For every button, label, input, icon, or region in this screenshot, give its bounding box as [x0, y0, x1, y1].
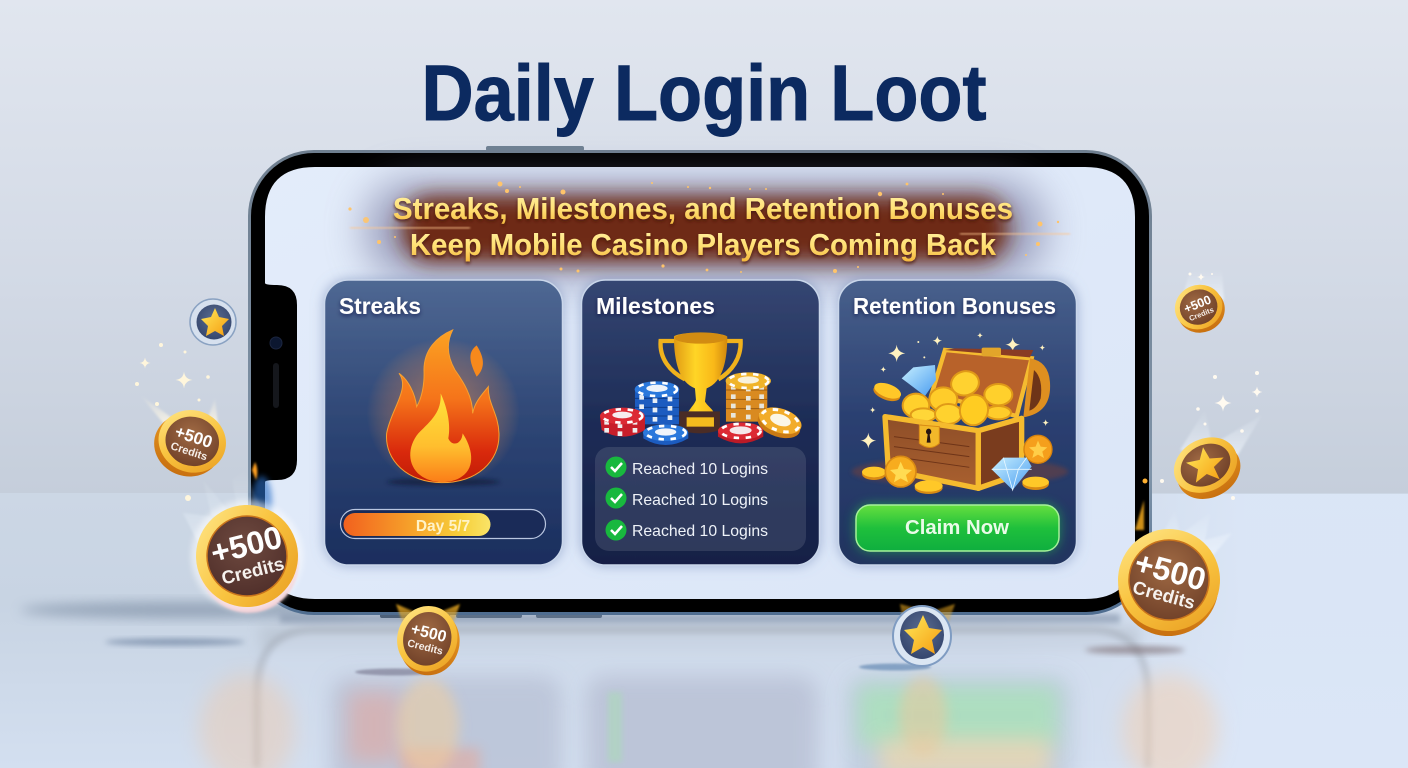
- chest lid: [932, 350, 1032, 416]
- coin: +500 credits large right: [1105, 518, 1231, 647]
- heading: milestones: Milestones: [596, 293, 715, 319]
- light trails and sparkles: right: [252, 270, 1262, 632]
- camera and speaker: [270, 337, 282, 408]
- icon: flame: [367, 330, 520, 488]
- title: Daily Login Loot: [422, 48, 986, 137]
- icon: treasure chest: [852, 332, 1068, 494]
- coin: +500 credits bottom: Credits: [406, 637, 444, 658]
- light trails and sparkles: left: [135, 343, 272, 570]
- background floor: [0, 493, 1408, 768]
- headline line 1: Streaks, Milestones, and Retention Bonuses: [393, 191, 1013, 226]
- chip stack blue: [635, 389, 679, 424]
- diamond front: [992, 458, 1032, 490]
- phone frame buttons: [380, 146, 602, 618]
- lock: [919, 425, 939, 447]
- card background: [582, 280, 820, 565]
- check item 3: [606, 520, 768, 540]
- panel: milestones: [582, 280, 820, 565]
- diamond back: [902, 365, 936, 396]
- chest front: [885, 417, 978, 488]
- phone reflection on the floor: [199, 626, 1218, 768]
- coin: +500 credits large left: Credits: [219, 553, 286, 588]
- headline line 2: Keep Mobile Casino Players Coming Back: [410, 227, 997, 262]
- button: claim now: Claim Now: [905, 517, 1009, 539]
- coin: +500 credits small left: Credits: [169, 440, 209, 463]
- floor shadows: [20, 602, 1185, 676]
- coin: star chip bottom: [893, 606, 951, 666]
- chip stack red: [600, 417, 645, 437]
- card background: [324, 280, 562, 565]
- progress bar: Day 5/7: [416, 518, 470, 535]
- check item 2: Reached 10 Logins: [632, 492, 768, 509]
- coin: +500 credits top right: [1168, 277, 1232, 340]
- check item 2: [606, 488, 768, 509]
- check item 1: Reached 10 Logins: [632, 461, 768, 478]
- phone: [248, 146, 1152, 618]
- coin: star coin right: [1164, 427, 1250, 510]
- coin: +500 credits bottom: [389, 600, 467, 682]
- coin: +500 credits small left: +500: [173, 422, 215, 452]
- phone body: [248, 150, 1152, 615]
- coin: +500 credits large right: +500: [1131, 544, 1210, 598]
- checklist: [595, 447, 806, 551]
- headline glow: [365, 180, 1045, 280]
- coin: +500 credits large left: [179, 488, 315, 625]
- coin: +500 credits large right: Credits: [1131, 576, 1198, 613]
- heading: retention bonuses: Retention Bonuses: [853, 293, 1056, 319]
- background wall: [0, 0, 1408, 494]
- button: claim now: [856, 505, 1059, 551]
- headline sparks: [348, 182, 1070, 273]
- coin: +500 credits large left: +500: [207, 519, 286, 571]
- headline: [348, 180, 1070, 280]
- coin: star chip top left: [190, 299, 236, 345]
- coin pile: [903, 368, 1012, 428]
- heading: streaks: Streaks: [339, 293, 421, 319]
- chip stack orange: [726, 380, 767, 422]
- coin: +500 credits top right: Credits: [1188, 305, 1215, 323]
- icon: trophy and chips: [600, 332, 805, 445]
- check item 3: Reached 10 Logins: [632, 523, 768, 540]
- coin: +500 credits bottom: +500: [409, 621, 448, 646]
- sparkles: [860, 332, 1049, 449]
- card background: [838, 280, 1076, 565]
- coin: +500 credits top right: +500: [1182, 293, 1213, 316]
- chip blue front: [643, 433, 688, 445]
- panel: retention bonuses: [838, 280, 1076, 565]
- chip red front: [718, 432, 763, 443]
- chip tilted orange: [754, 402, 805, 443]
- phone screen: [265, 167, 1135, 599]
- progress bar: [340, 510, 546, 538]
- trophy: [661, 341, 741, 379]
- panel: streaks: [324, 280, 562, 565]
- floor coins: [862, 435, 1052, 494]
- coin: +500 credits small left: [146, 400, 234, 486]
- loose coin: [871, 380, 903, 404]
- check item 1: [606, 456, 768, 478]
